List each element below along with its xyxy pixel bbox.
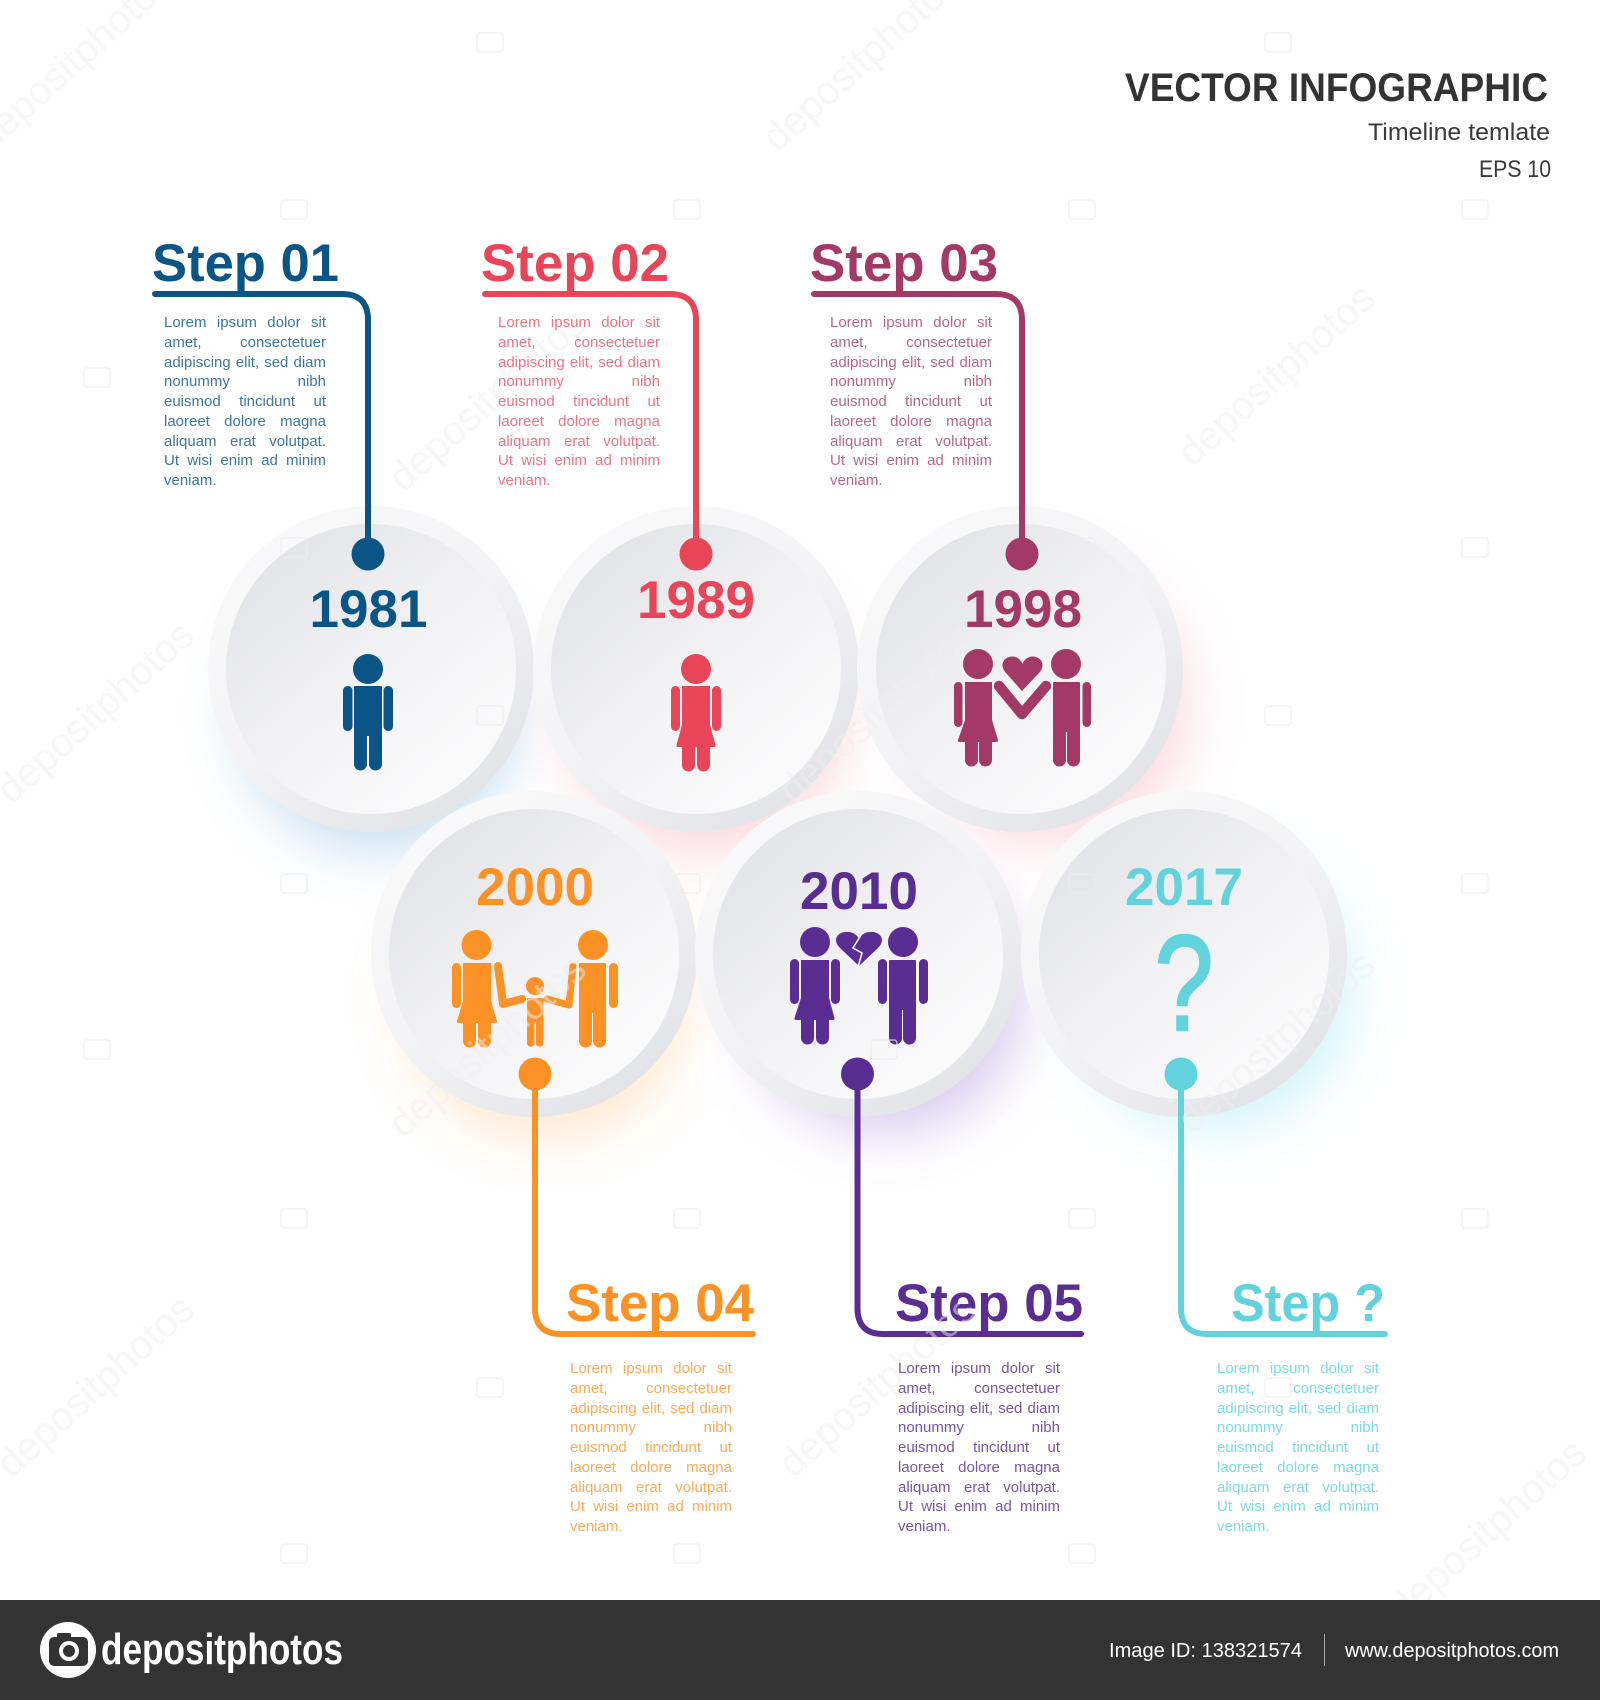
text block: step 02: Lorem ipsum dolor sit xyxy=(498,314,660,331)
text block: step 04: laoreet dolore magna xyxy=(570,1459,732,1476)
watermark layer: depositphotos xyxy=(380,301,595,500)
circle: 2017 xyxy=(1021,791,1347,1117)
coloured glows behind circles xyxy=(238,565,1352,1138)
watermark layer: depositphotos xyxy=(1169,943,1384,1142)
text block: step ?: Lorem ipsum dolor sit xyxy=(1217,1360,1379,1377)
step 01 heading and connector xyxy=(152,234,384,570)
step 05 heading and connector: Step 05 xyxy=(895,1274,1083,1333)
text block: step ?: laoreet dolore magna xyxy=(1217,1459,1379,1476)
text block: step 01: Ut wisi enim ad minim xyxy=(164,452,326,469)
step 03 heading and connector xyxy=(810,234,1038,570)
text block: step 03: aliquam erat volutpat. xyxy=(830,432,992,450)
text block: step 02: Ut wisi enim ad minim xyxy=(498,452,660,469)
text block: step 01: amet, consectetuer xyxy=(164,334,326,351)
text block: step 02: laoreet dolore magna xyxy=(498,413,660,430)
text block: step 01 xyxy=(164,314,326,489)
text block: step 04: nonummy nibh xyxy=(570,1419,732,1436)
step ? heading and connector: Step ? xyxy=(1231,1274,1385,1333)
text block: step 03 xyxy=(830,314,992,489)
text block: step 05: Lorem ipsum dolor sit xyxy=(898,1360,1060,1377)
icon: family with child xyxy=(452,930,618,1048)
text block: step 04: aliquam erat volutpat. xyxy=(570,1478,732,1496)
text block: step 03: laoreet dolore magna xyxy=(830,413,992,430)
step 01 heading and connector: Step 01 xyxy=(152,234,339,293)
text block: step ?: nonummy nibh xyxy=(1217,1419,1379,1436)
text block: step ?: euismod tincidunt ut xyxy=(1217,1439,1379,1456)
year 1981: 1981 xyxy=(310,580,427,639)
watermark layer: depositphotos xyxy=(770,1287,985,1486)
text block: step 05: adipiscing elit, sed diam xyxy=(898,1400,1060,1416)
year 2010: 2010 xyxy=(800,862,918,921)
text block: step 04: amet, consectetuer xyxy=(570,1380,732,1397)
text block: step 03: veniam. xyxy=(830,472,883,489)
text block: step ?: veniam. xyxy=(1217,1518,1270,1535)
text block: step 05: veniam. xyxy=(898,1518,951,1535)
circle: 1989 xyxy=(533,506,859,832)
watermark camera marks xyxy=(84,33,1488,1563)
title block: VECTOR INFOGRAPHIC xyxy=(1125,66,1548,110)
logo icon: camera xyxy=(40,1622,96,1678)
icon: man xyxy=(343,654,393,770)
text block: step ? xyxy=(1217,1360,1379,1535)
text block: step 05: Ut wisi enim ad minim xyxy=(898,1498,1060,1515)
text block: step 01: adipiscing elit, sed diam xyxy=(164,354,326,370)
step 04 heading and connector: Step 04 xyxy=(566,1274,755,1333)
year 1989: 1989 xyxy=(637,571,755,630)
text block: step 04: veniam. xyxy=(570,1518,623,1535)
circle: 2000 xyxy=(371,791,697,1117)
text block: step 02: euismod tincidunt ut xyxy=(498,393,660,410)
text block: step 02: aliquam erat volutpat. xyxy=(498,432,660,450)
icon: couple with heart xyxy=(954,649,1091,766)
text block: step 03: euismod tincidunt ut xyxy=(830,393,992,410)
text block: step 01: aliquam erat volutpat. xyxy=(164,432,326,450)
text block: step 04: Ut wisi enim ad minim xyxy=(570,1498,732,1515)
text block: step 03: adipiscing elit, sed diam xyxy=(830,354,992,370)
text block: step 05: euismod tincidunt ut xyxy=(898,1439,1060,1456)
text block: step 05: aliquam erat volutpat. xyxy=(898,1478,1060,1496)
watermark layer: depositphotos xyxy=(380,947,595,1146)
title block xyxy=(1125,66,1551,183)
text block: step 01: nonummy nibh xyxy=(164,373,326,390)
watermark layer: depositphotos xyxy=(1169,276,1384,475)
text block: step 03: Ut wisi enim ad minim xyxy=(830,452,992,469)
text block: step ?: Ut wisi enim ad minim xyxy=(1217,1498,1379,1515)
logo wordmark: depositphotos xyxy=(101,1625,343,1674)
text block: step 02: amet, consectetuer xyxy=(498,334,660,351)
text block: step 02: veniam. xyxy=(498,472,551,489)
circle: 2010 xyxy=(695,791,1021,1117)
year 2017: 2017 xyxy=(1125,858,1243,917)
text block: step 02: nonummy nibh xyxy=(498,373,660,390)
step 02 heading and connector xyxy=(481,234,712,570)
text block: step ?: aliquam erat volutpat. xyxy=(1217,1478,1379,1496)
website: www.depositphotos.com xyxy=(1344,1640,1559,1662)
text block: step 01: Lorem ipsum dolor sit xyxy=(164,314,326,331)
year 2000: 2000 xyxy=(476,858,594,917)
text block: step 05 xyxy=(898,1360,1060,1535)
text block: step 05: amet, consectetuer xyxy=(898,1380,1060,1397)
watermark layer: depositphotos xyxy=(770,613,985,812)
text block: step ?: adipiscing elit, sed diam xyxy=(1217,1400,1379,1416)
step ? heading and connector xyxy=(1164,1058,1385,1334)
text block: step 01: veniam. xyxy=(164,472,217,489)
circle: 1998 xyxy=(857,506,1183,832)
text block: step 04: Lorem ipsum dolor sit xyxy=(570,1360,732,1377)
bottom bar xyxy=(0,1600,1600,1700)
icon: question mark: ? xyxy=(1155,907,1213,1059)
text block: step 04: euismod tincidunt ut xyxy=(570,1439,732,1456)
text block: step 02: adipiscing elit, sed diam xyxy=(498,354,660,370)
text block: step 05: nonummy nibh xyxy=(898,1419,1060,1436)
icon: separated couple with broken heart xyxy=(790,927,928,1044)
title block: Timeline temlate xyxy=(1368,119,1550,146)
text block: step 03: amet, consectetuer xyxy=(830,334,992,351)
text block: step 04: adipiscing elit, sed diam xyxy=(570,1400,732,1416)
text block: step 02 xyxy=(498,314,660,489)
text block: step 01: euismod tincidunt ut xyxy=(164,393,326,410)
text block: step 05: laoreet dolore magna xyxy=(898,1459,1060,1476)
year 1998: 1998 xyxy=(964,580,1082,639)
step 02 heading and connector: Step 02 xyxy=(481,234,669,293)
image id: Image ID: 138321574 xyxy=(1109,1640,1302,1662)
step 04 heading and connector xyxy=(518,1058,755,1334)
text block: step 03: nonummy nibh xyxy=(830,373,992,390)
text block: step 03: Lorem ipsum dolor sit xyxy=(830,314,992,331)
text block: step 01: laoreet dolore magna xyxy=(164,413,326,430)
icon: woman xyxy=(671,654,721,772)
circle: 1981 xyxy=(208,506,534,832)
title block: EPS 10 xyxy=(1479,156,1551,183)
watermark layer: depositphotos xyxy=(1380,1431,1595,1630)
text block: step 04 xyxy=(570,1360,732,1535)
step 03 heading and connector: Step 03 xyxy=(810,234,998,293)
text block: step ?: amet, consectetuer xyxy=(1217,1380,1379,1397)
step 05 heading and connector xyxy=(841,1058,1083,1334)
